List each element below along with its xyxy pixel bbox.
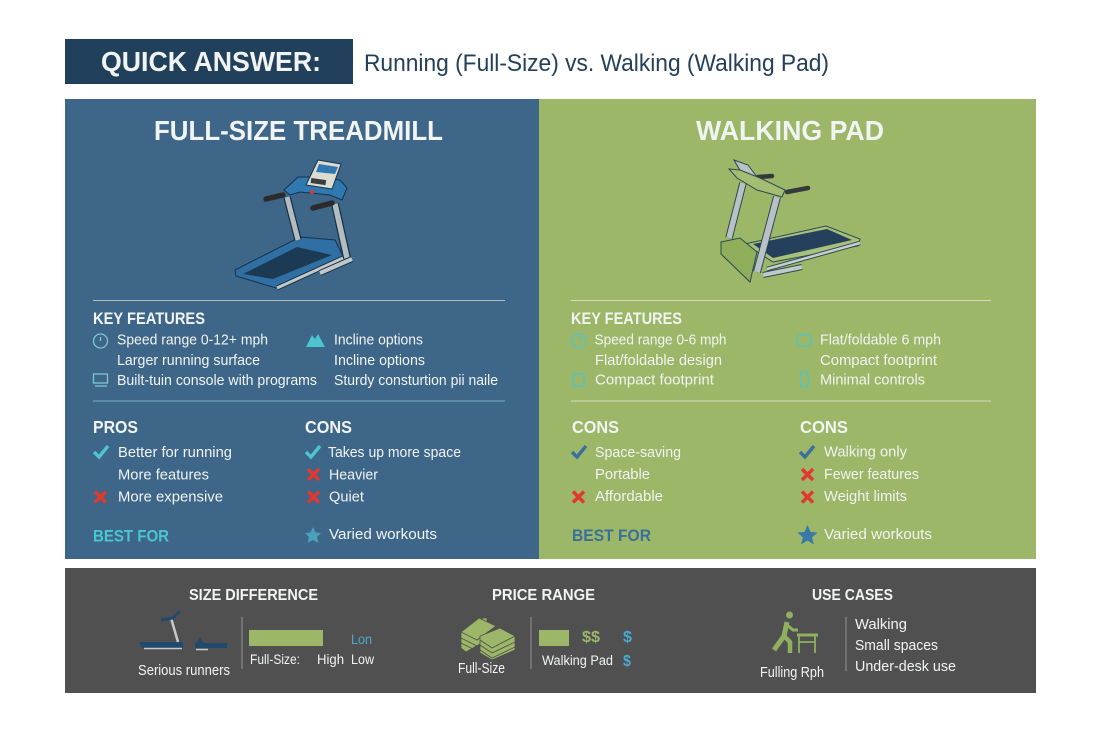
icon: cross [802,469,813,480]
price range: $ [623,653,631,670]
icon: cross [573,492,584,502]
cons [305,417,461,506]
icon: check [800,446,814,457]
key features [571,310,941,388]
divider [571,300,991,302]
use cases [760,587,956,681]
price range: $$ [582,629,600,646]
header: quick answer [65,39,829,84]
icon: controls [801,372,808,387]
use cases: Walking [855,617,907,633]
quick answer badge: QUICK ANSWER: [101,46,321,77]
size difference: Full-Size: [250,652,300,667]
key features: Built-tuin console with programs [117,373,317,389]
key features: Larger running surface [117,353,260,369]
best for [93,526,437,546]
icon: cross [802,492,813,502]
icon: check [306,446,320,457]
illustration: walking pad [721,160,860,282]
key features: Sturdy consturtion pii naile [334,373,498,389]
price range: $ [623,629,632,646]
right cons column: Fewer features [824,467,919,483]
key features heading: KEY FEATURES [571,310,682,328]
size difference: Lon [351,632,372,647]
pros: More features [118,468,209,484]
pros: Better for running [118,445,232,461]
price range [458,587,632,677]
quick answer badge [65,39,353,84]
divider [93,300,505,302]
icon: cross [308,469,319,480]
divider [93,400,505,402]
cons: Quiet [329,490,364,506]
icon: speed gauge [94,334,108,348]
panel: comparison strip [65,568,1036,693]
icon: treadmill size comparison [139,611,227,650]
cons: CONS [305,417,352,437]
illustration: full-size treadmill [235,160,352,288]
key features: Flat/foldable 6 mph [820,332,941,348]
cons: Takes up more space [328,445,461,461]
use cases: Fulling Rph [760,665,824,681]
icon: cross [308,492,319,502]
header subtitle: Running (Full-Size) vs. Walking (Walking Pad) [364,50,829,77]
use cases: Under-desk use [855,659,956,675]
price range: PRICE RANGE [492,587,595,604]
heading: walking pad: WALKING PAD [696,115,884,146]
icon: console monitor [94,374,108,386]
icon: star [305,527,321,543]
price range: Walking Pad [542,653,613,668]
icon: mountains [306,334,325,347]
icon: star [798,525,818,544]
size difference: SIZE DIFFERENCE [189,587,318,604]
left cons column: Space-saving [595,445,681,461]
pros: PROS [93,417,138,437]
right cons column: Weight limits [824,489,907,505]
key features: Incline options [334,353,425,369]
cons: Heavier [329,468,378,484]
left cons column: Affordable [595,489,663,505]
best for: BEST FOR [572,526,651,545]
key features: Flat/foldable design [595,353,722,369]
key features: Speed range 0-12+ mph [117,332,268,348]
size difference: Serious runners [138,663,230,679]
key features: Minimal controls [820,372,925,388]
icon: flat deck [797,335,811,346]
icon: speed gauge [572,334,586,348]
key features: Compact footprint [820,353,937,369]
best for [572,525,932,545]
key features: Speed range 0-6 mph [594,332,726,348]
pros: More expensive [118,490,223,506]
use cases: USE CASES [812,587,893,604]
right cons column: Walking only [824,444,908,460]
left cons column: Portable [595,467,650,483]
icon: check [94,446,108,457]
best for: BEST FOR [93,526,169,546]
size difference: Low [351,652,374,667]
icon: walker at desk [774,612,818,653]
left cons column [572,417,681,505]
size difference: High [317,652,344,667]
size bar [249,630,323,646]
price range: Full-Size [458,661,505,677]
right cons column [800,417,919,505]
right cons column: CONS [800,417,848,437]
key features [93,310,498,389]
use cases: Small spaces [855,638,938,654]
heading: full-size treadmill: FULL-SIZE TREADMILL [154,115,443,146]
key features: Compact footprint [595,372,714,388]
best for: Varied workouts [329,527,437,543]
key features: Incline options [334,332,423,348]
left cons column: CONS [572,417,619,437]
best for: Varied workouts [824,527,932,543]
icon: check [572,446,586,457]
size difference [138,587,374,679]
divider [571,400,991,402]
price bar [539,630,569,646]
icon: money stacks [461,618,515,660]
icon: compact square [573,374,584,386]
panel: full-size treadmill [65,99,539,559]
key features heading: KEY FEATURES [93,310,205,328]
panel: walking pad [539,99,1036,559]
pros [93,417,232,506]
icon: cross [95,492,106,502]
